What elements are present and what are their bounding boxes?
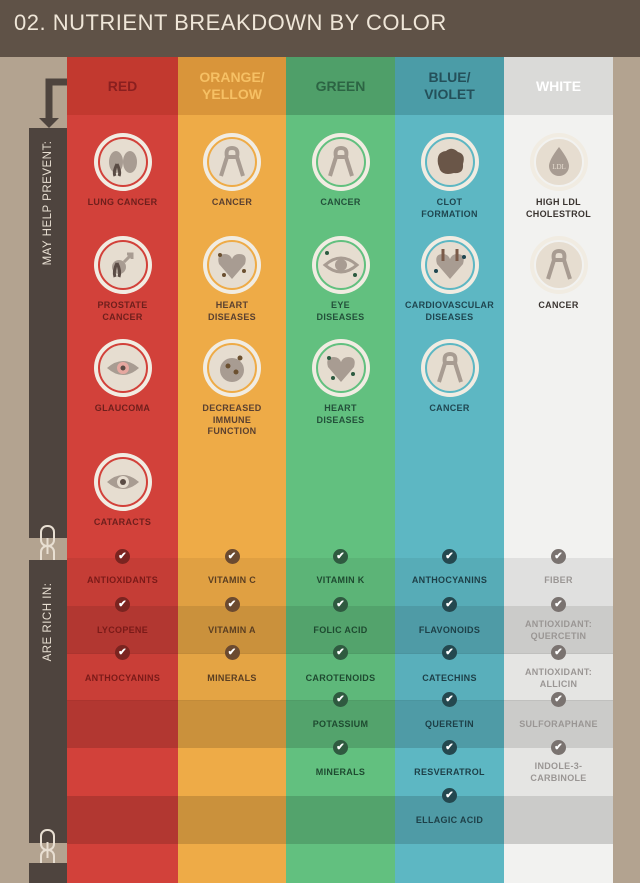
icon: cancer ribbon [420, 339, 478, 397]
column: green: ✔ [336, 647, 345, 658]
column: orange/yellow: DECREASED [202, 403, 262, 413]
column: orange/yellow: ✔ [228, 599, 236, 610]
icon: cancer ribbon [312, 133, 370, 191]
column: white: FIBER [544, 575, 573, 585]
side bar: may help prevent: MAY HELP PREVENT: [42, 141, 54, 265]
column: blue/violet: QUERETIN [425, 719, 474, 729]
chain icon [40, 525, 55, 560]
icon: heart [312, 339, 370, 397]
column: orange/yellow: VITAMIN A [208, 625, 256, 635]
column: blue/violet: VIOLET [424, 86, 475, 102]
column: white: HIGH LDL [536, 197, 581, 207]
column: orange/yellow: CANCER [212, 197, 252, 207]
column: blue/violet: ✔ [445, 694, 454, 705]
column: white: CANCER [538, 300, 579, 310]
chain icon bottom [40, 829, 55, 863]
nutrients: orange [224, 549, 240, 564]
icon: clot [420, 133, 478, 191]
column: orange/yellow: IMMUNE [213, 414, 251, 424]
nutrients: blue: ✔ [445, 551, 454, 562]
column: red: ANTIOXIDANTS [87, 575, 158, 585]
nutrients: green [333, 549, 348, 564]
icon: eye [312, 236, 370, 294]
icon: heart diseases [203, 236, 261, 294]
column: blue/violet: ✔ [445, 742, 454, 753]
column: red: ANTHOCYANINS [85, 673, 160, 683]
column: white: ✔ [554, 647, 563, 658]
column: green: CANCER [320, 197, 361, 207]
column: blue/violet: ELLAGIC ACID [416, 815, 483, 825]
icon: cancer ribbon [203, 133, 261, 191]
column: red: ✔ [118, 647, 127, 658]
column: green: GREEN [316, 78, 365, 94]
column: orange/yellow: HEART [216, 300, 248, 310]
column: red: ✔ [118, 599, 127, 610]
icon: cataracts [94, 453, 152, 511]
column: white: ANTIOXIDANT: [525, 619, 592, 629]
column: white: CHOLESTROL [526, 208, 591, 218]
column: white: ✔ [554, 599, 563, 610]
nutrients: white: ✔ [554, 551, 563, 562]
column: blue/violet: RESVERATROL [414, 767, 485, 777]
column: white: QUERCETIN [531, 631, 586, 641]
column: white: CARBINOLE [530, 773, 587, 783]
icon: immune function [203, 339, 261, 397]
column: red [67, 57, 178, 883]
column: orange/yellow: YELLOW [202, 86, 262, 102]
column: green: EYE [331, 300, 350, 310]
nutrients: blue [442, 549, 457, 564]
column: orange/yellow: VITAMIN C [208, 575, 256, 585]
column: green: ✔ [336, 742, 345, 753]
column: white: ALLICIN [540, 679, 577, 689]
column: blue/violet: DISEASES [426, 312, 473, 322]
nutrients: red: ✔ [118, 551, 127, 562]
column: red: CATARACTS [94, 517, 151, 527]
side bar: are rich in [29, 560, 67, 843]
column: blue/violet: ✔ [445, 790, 454, 801]
column: blue/violet: CARDIOVASCULAR [405, 300, 494, 310]
column: blue/violet: CATECHINS [422, 673, 477, 683]
side bar: may help prevent [29, 128, 67, 538]
column: blue/violet: ✔ [445, 599, 454, 610]
column: red: CANCER [102, 312, 143, 322]
column: blue/violet: FORMATION [421, 208, 478, 218]
column: green: CAROTENOIDS [306, 673, 375, 683]
icon: cancer ribbon [530, 236, 588, 294]
column: green: FOLIC ACID [313, 625, 368, 635]
column: orange/yellow: ✔ [228, 647, 236, 658]
column: red: LYCOPENE [97, 625, 148, 635]
column: red: RED [108, 78, 137, 94]
nutrients: white [551, 549, 566, 564]
column: orange/yellow: FUNCTION [208, 426, 256, 436]
column: white: ✔ [554, 694, 563, 705]
title bar: 02. NUTRIENT BREAKDOWN BY COLOR [14, 10, 447, 35]
column: white: ANTIOXIDANT: [525, 667, 592, 677]
column: white: WHITE [536, 78, 581, 94]
side bar: are rich in: ARE RICH IN: [42, 583, 54, 661]
column: blue/violet: CANCER [429, 403, 470, 413]
column: white: SULFORAPHANE [519, 719, 598, 729]
column: blue/violet [395, 57, 504, 883]
column: orange/yellow [178, 57, 286, 883]
column: red: GLAUCOMA [95, 403, 150, 413]
icon: glaucoma [94, 339, 152, 397]
column: orange/yellow: MINERALS [207, 673, 257, 683]
column: white [504, 57, 613, 883]
icon: cardiovascular [420, 236, 478, 294]
column: red: PROSTATE [97, 300, 148, 310]
column: green: POTASSIUM [313, 719, 368, 729]
column: orange/yellow: DISEASES [208, 312, 256, 322]
icon: LDL drop: LDL [552, 163, 565, 171]
column: blue/violet: ANTHOCYANINS [412, 575, 487, 585]
icon: prostate cancer [94, 236, 152, 294]
column: blue/violet: BLUE/ [428, 69, 470, 85]
column: green: DISEASES [317, 414, 364, 424]
column: green: HEART [324, 403, 357, 413]
column: green: MINERALS [316, 767, 365, 777]
nutrients: red [115, 549, 130, 564]
column: green [286, 57, 395, 883]
column: blue/violet: ✔ [445, 647, 454, 658]
nutrients: orange: ✔ [228, 551, 236, 562]
title bar [0, 0, 640, 57]
column: orange/yellow: ORANGE/ [199, 69, 265, 85]
column: red: LUNG CANCER [88, 197, 157, 207]
column: blue/violet: CLOT [437, 197, 462, 207]
column: green: ✔ [336, 599, 345, 610]
column: white: ✔ [554, 742, 563, 753]
column: green: DISEASES [317, 312, 364, 322]
arrow connector [39, 78, 67, 128]
column: green: ✔ [336, 694, 345, 705]
icon: lung cancer [94, 133, 152, 191]
column: green: VITAMIN K [316, 575, 365, 585]
column: white: INDOLE-3- [535, 761, 582, 771]
column: blue/violet: FLAVONOIDS [419, 625, 480, 635]
icon: LDL drop [530, 133, 588, 191]
nutrients: green: ✔ [336, 551, 345, 562]
